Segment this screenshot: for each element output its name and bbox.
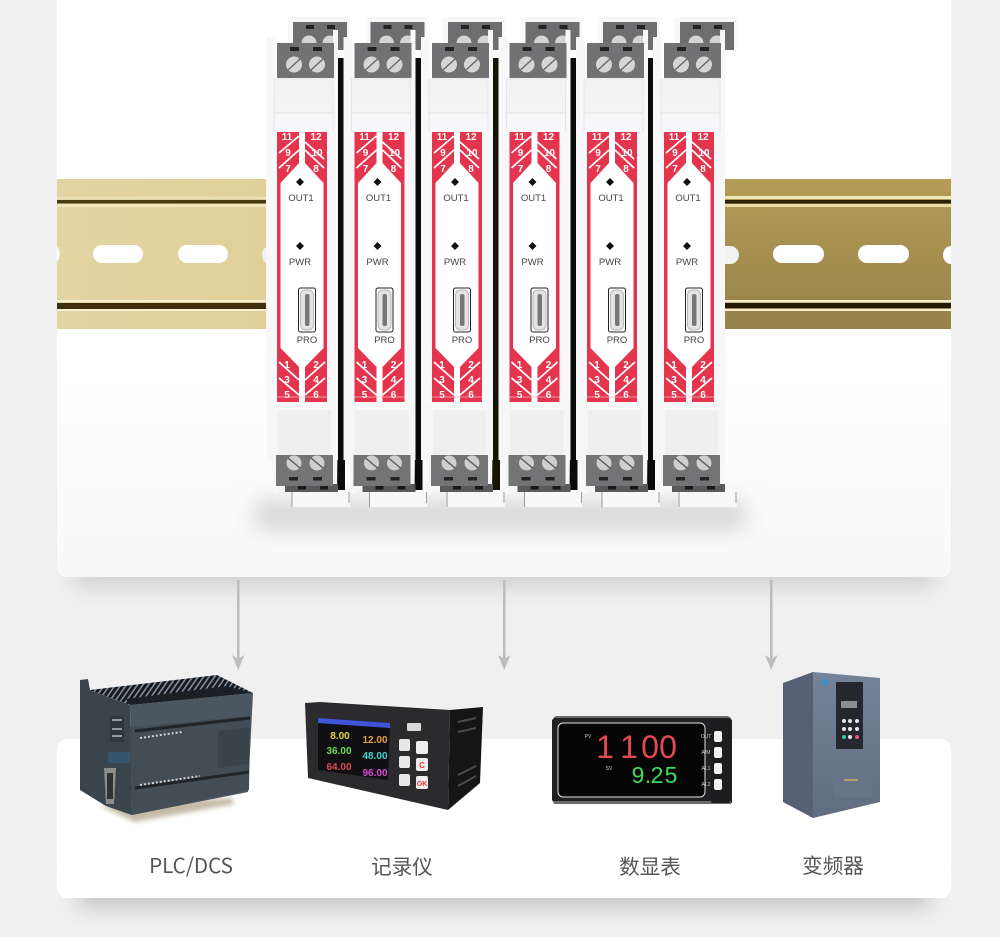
- module 5: 6: [623, 390, 629, 401]
- module 5: 12: [620, 132, 632, 143]
- device: recorder: 8.00: [330, 731, 350, 742]
- module 2: 8: [391, 164, 397, 175]
- module 2: 7: [363, 164, 369, 175]
- label: recorder: 记录仪: [371, 850, 433, 880]
- panel: DIN rail mount: [57, 0, 951, 577]
- module array shadow: [255, 500, 745, 530]
- module 3: 9: [440, 148, 446, 159]
- device: digital display: [552, 716, 732, 804]
- module 1: PWR: [289, 257, 311, 268]
- module 6: 6: [700, 390, 706, 401]
- module 3: 10: [466, 148, 478, 159]
- module 3: 12: [465, 132, 477, 143]
- module 5: 1: [594, 360, 600, 371]
- module 2: OUT1: [366, 193, 391, 204]
- module 5: OUT1: [598, 193, 624, 204]
- module 2: 5: [362, 390, 368, 401]
- module 4: [498, 17, 582, 507]
- module 1: [266, 17, 350, 507]
- module 1: 4: [313, 375, 319, 386]
- module 1: 10: [311, 148, 323, 159]
- module 4: PRO: [529, 335, 550, 346]
- module 4: 5: [517, 390, 523, 401]
- module 1: 1: [284, 360, 290, 371]
- module 4: 11: [514, 132, 525, 143]
- device: recorder: 96.00: [362, 768, 388, 779]
- module 4: 10: [544, 148, 555, 159]
- module 4: 12: [543, 132, 554, 143]
- module 3: 8: [468, 164, 474, 175]
- module 3: 2: [468, 360, 474, 371]
- DIN rail right section: [724, 179, 951, 329]
- module 6: 10: [698, 148, 710, 159]
- module 1: 9: [285, 148, 291, 159]
- module 4: PWR: [521, 257, 544, 268]
- module 6: 4: [700, 375, 706, 386]
- module 3: 3: [439, 375, 445, 386]
- bottom panel shadow: [78, 870, 930, 908]
- gaps between modules: [337, 58, 655, 490]
- device: recorder: C: [419, 761, 425, 770]
- module 4: OUT1: [521, 193, 546, 204]
- device: digital display: 9.25: [632, 762, 677, 788]
- module 4: 7: [518, 164, 524, 175]
- module 3: PWR: [444, 257, 466, 268]
- device: recorder: 36.00: [326, 746, 352, 757]
- module 1: PRO: [297, 335, 317, 346]
- module 2: 6: [391, 390, 397, 401]
- module 6: 9: [672, 148, 678, 159]
- device: digital display: A/M: [702, 750, 710, 756]
- device: recorder: OK: [417, 781, 427, 788]
- module 1: 3: [284, 375, 290, 386]
- module 2: 4: [391, 375, 397, 386]
- module 4: 9: [518, 148, 524, 159]
- device: recorder: 64.00: [326, 762, 352, 773]
- device: recorder: 12.00: [362, 735, 388, 746]
- module 2: 11: [359, 132, 370, 143]
- module 6: PRO: [684, 335, 704, 346]
- device: digital display: SV: [606, 766, 613, 772]
- module 1: 6: [313, 390, 319, 401]
- module 5: 4: [623, 375, 629, 386]
- module 5: PWR: [599, 257, 621, 268]
- module 2: 2: [391, 360, 397, 371]
- module 5: PRO: [607, 335, 627, 346]
- module 3: 6: [468, 390, 474, 401]
- module 4: 4: [546, 375, 552, 386]
- module 1: 12: [310, 132, 322, 143]
- module 1: 2: [313, 360, 319, 371]
- module 1: 7: [285, 164, 291, 175]
- module 2: PRO: [374, 335, 395, 346]
- module 6: [653, 17, 737, 507]
- module 3: PRO: [452, 335, 472, 346]
- module 6: 12: [697, 132, 709, 143]
- module 5: 5: [594, 390, 600, 401]
- module 1: OUT1: [288, 193, 314, 204]
- module 4: 2: [546, 360, 552, 371]
- device: digital display: AL1: [702, 766, 711, 772]
- module 6: 5: [671, 390, 677, 401]
- arrow: to recorder: [498, 580, 510, 670]
- module 3: 7: [440, 164, 446, 175]
- module 2: 1: [362, 360, 368, 371]
- module 5: 8: [623, 164, 629, 175]
- arrow: to PLC/DCS: [232, 580, 244, 670]
- module 2: 10: [389, 148, 400, 159]
- module 6: 8: [700, 164, 706, 175]
- module 2: [344, 17, 428, 507]
- module 6: OUT1: [675, 193, 701, 204]
- module 4: 1: [517, 360, 523, 371]
- module 4: 6: [546, 390, 552, 401]
- device: inverter: [783, 672, 880, 818]
- module 3: [421, 17, 505, 507]
- module 3: 4: [468, 375, 474, 386]
- device: PLC: [80, 675, 253, 822]
- device: digital display: PV: [585, 734, 592, 740]
- module 2: 9: [363, 148, 369, 159]
- module 6: 2: [700, 360, 706, 371]
- module 2: PWR: [366, 257, 389, 268]
- module 3: 11: [437, 132, 448, 143]
- device: digital display: 1100: [596, 729, 677, 765]
- module 6: 7: [672, 164, 678, 175]
- module 3: 5: [439, 390, 445, 401]
- label: inverter: 变频器: [802, 849, 864, 879]
- module 4: 8: [546, 164, 552, 175]
- arrow: to digital display: [765, 580, 778, 670]
- module 3: 1: [439, 360, 445, 371]
- module 6: PWR: [676, 257, 698, 268]
- device: digital display: AL2: [702, 782, 711, 788]
- label: PLC/DCS: PLC/DCS: [149, 849, 233, 879]
- module 6: 3: [671, 375, 677, 386]
- module 5: 9: [595, 148, 601, 159]
- module 1: 11: [282, 132, 293, 143]
- top panel shadow: [75, 530, 933, 588]
- module 5: [576, 17, 660, 507]
- module 5: 11: [592, 132, 603, 143]
- module 6: 11: [669, 132, 680, 143]
- module 5: 3: [594, 375, 600, 386]
- module 5: 2: [623, 360, 629, 371]
- module 4: 3: [517, 375, 523, 386]
- device: digital display: OUT: [701, 734, 711, 740]
- device: recorder: 48.00: [362, 751, 388, 762]
- module 2: 12: [388, 132, 399, 143]
- module 5: 10: [621, 148, 633, 159]
- module 5: 7: [595, 164, 601, 175]
- module 6: 1: [671, 360, 677, 371]
- module 1: 8: [313, 164, 319, 175]
- label: digital display: 数显表: [619, 850, 681, 880]
- device: recorder: [305, 702, 483, 810]
- panel: connected devices: [57, 739, 951, 898]
- module 3: OUT1: [443, 193, 469, 204]
- module 2: 3: [362, 375, 368, 386]
- module 1: 5: [284, 390, 290, 401]
- DIN rail left section: [57, 179, 267, 329]
